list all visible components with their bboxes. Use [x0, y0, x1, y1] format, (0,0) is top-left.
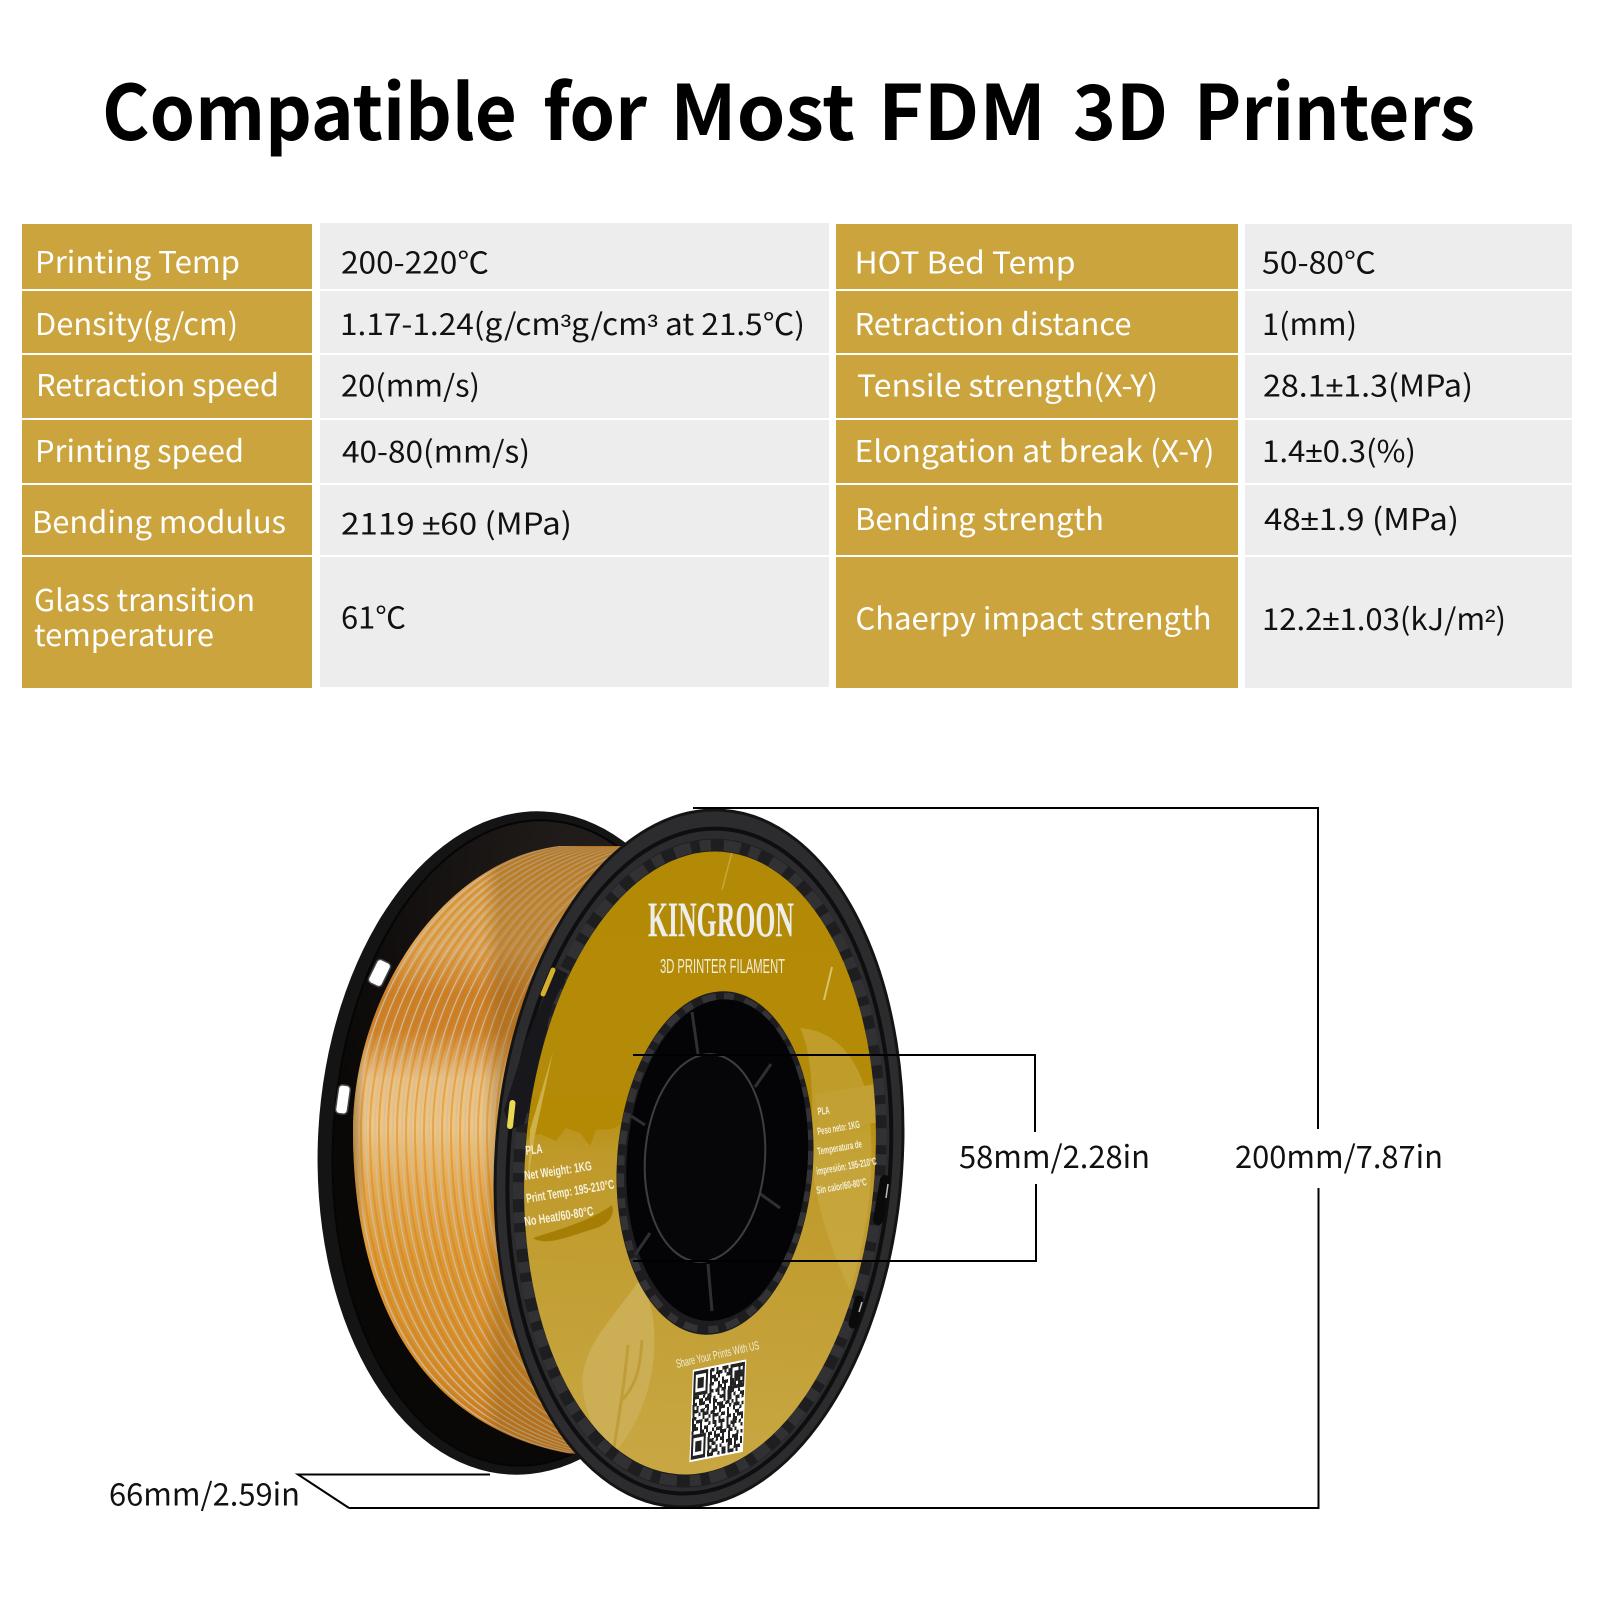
- left column label text: Glass transition: [34, 576, 255, 620]
- title: for: [543, 52, 648, 162]
- title: FDM: [878, 52, 1046, 162]
- left column value text: 200-220℃: [341, 238, 489, 282]
- left column value text: 40-80(mm/s): [342, 428, 530, 472]
- right spec text on label: PLA: [817, 1105, 831, 1118]
- right column label text: [854, 238, 1214, 638]
- centre hub: [605, 985, 825, 1341]
- left column label text: Printing Temp: [35, 238, 240, 282]
- dimension: 58mm hub diameter: 58mm/2.28in: [959, 1132, 1150, 1177]
- left column value text: 61℃: [341, 594, 406, 638]
- left column label text: Printing speed: [35, 427, 244, 471]
- left column label text: Bending modulus: [32, 498, 286, 542]
- title: [102, 52, 1475, 162]
- left spec text on label: PLA: [525, 1141, 544, 1158]
- filament spool illustration: [301, 795, 927, 1522]
- brand name: KINGROON: [648, 891, 794, 947]
- dimension: 200mm spool diameter: 200mm/7.87in: [1235, 1132, 1443, 1177]
- right column label text: Chaerpy impact strength: [856, 594, 1212, 638]
- right column value text: 12.2±1.03(kJ/m²): [1262, 595, 1506, 639]
- right column labels background: [836, 224, 1238, 688]
- title: Most: [670, 52, 855, 162]
- inner tube: [638, 1050, 772, 1266]
- right spec text on label: impresión: 195-210°C: [815, 1156, 878, 1178]
- title: Compatible: [102, 52, 517, 162]
- title: 3D: [1073, 52, 1168, 162]
- hub spokes: [631, 1012, 780, 1311]
- right spec text on label: [815, 1105, 878, 1197]
- left column value text: [340, 238, 805, 638]
- right column label text: Tensile strength(X-Y): [857, 362, 1158, 406]
- filament winding: [353, 846, 621, 1454]
- right column label text: Elongation at break (X-Y): [854, 427, 1214, 471]
- left spec text on label: No Heat/60-80°C: [523, 1203, 595, 1229]
- flange clip slots: [504, 968, 888, 1324]
- dimension: 66mm spool width: 66mm/2.59in: [109, 1470, 300, 1514]
- spec table: [22, 223, 1572, 688]
- right spec text on label: Sin calor/60-80°C: [815, 1176, 868, 1197]
- right column value text: [1262, 238, 1506, 639]
- left column label text: Retraction speed: [36, 361, 279, 405]
- left column labels background: [22, 224, 312, 688]
- left column label text: Density(g/cm): [35, 300, 238, 344]
- right column value text: 50-80℃: [1262, 238, 1376, 282]
- right column label text: Bending strength: [855, 495, 1104, 539]
- dimension: 66mm spool width: [109, 1470, 490, 1514]
- QR code: [689, 1359, 746, 1462]
- left column value text: 20(mm/s): [341, 362, 480, 406]
- right column label text: HOT Bed Temp: [854, 238, 1076, 282]
- gold label disc: [524, 852, 876, 1474]
- back flange slots: [335, 958, 392, 1115]
- left column value text: 1.17-1.24(g/cm ³g/cm³ at 21.5℃): [340, 300, 805, 344]
- left column label text: temperature: [34, 611, 214, 655]
- label artwork: brush strokes, leaves: [515, 852, 880, 1452]
- left column label text: [32, 238, 286, 655]
- left column value text: 2119 ±60 (MPa): [341, 500, 572, 544]
- left column values background: [320, 223, 829, 687]
- front flange: [471, 795, 927, 1522]
- right column value text: 1.4±0.3(%): [1262, 427, 1416, 471]
- left spec text on label: Net Weight: 1KG: [523, 1158, 593, 1183]
- left spec text on label: Print Temp: 195-210°C: [525, 1176, 616, 1206]
- product line: 3D PRINTER FILAMENT: [660, 956, 785, 978]
- left spec text on label: [523, 1141, 616, 1229]
- right column label text: Retraction distance: [854, 300, 1132, 344]
- dimension: 58mm hub diameter: [633, 1055, 1150, 1261]
- dimension: 200mm spool diameter: [349, 808, 1443, 1508]
- right column value text: 1(mm): [1262, 300, 1357, 344]
- right column value text: 28.1±1.3(MPa): [1263, 362, 1473, 406]
- right spec text on label: Temperatura de: [816, 1138, 863, 1158]
- title: Printers: [1194, 52, 1475, 162]
- share caption: Share Your Prints With US: [675, 1338, 760, 1371]
- right column values background: [1245, 224, 1572, 688]
- right spec text on label: Peso neto: 1KG: [816, 1119, 861, 1138]
- back flange: [301, 801, 753, 1485]
- right column value text: 48±1.9 (MPa): [1264, 495, 1459, 539]
